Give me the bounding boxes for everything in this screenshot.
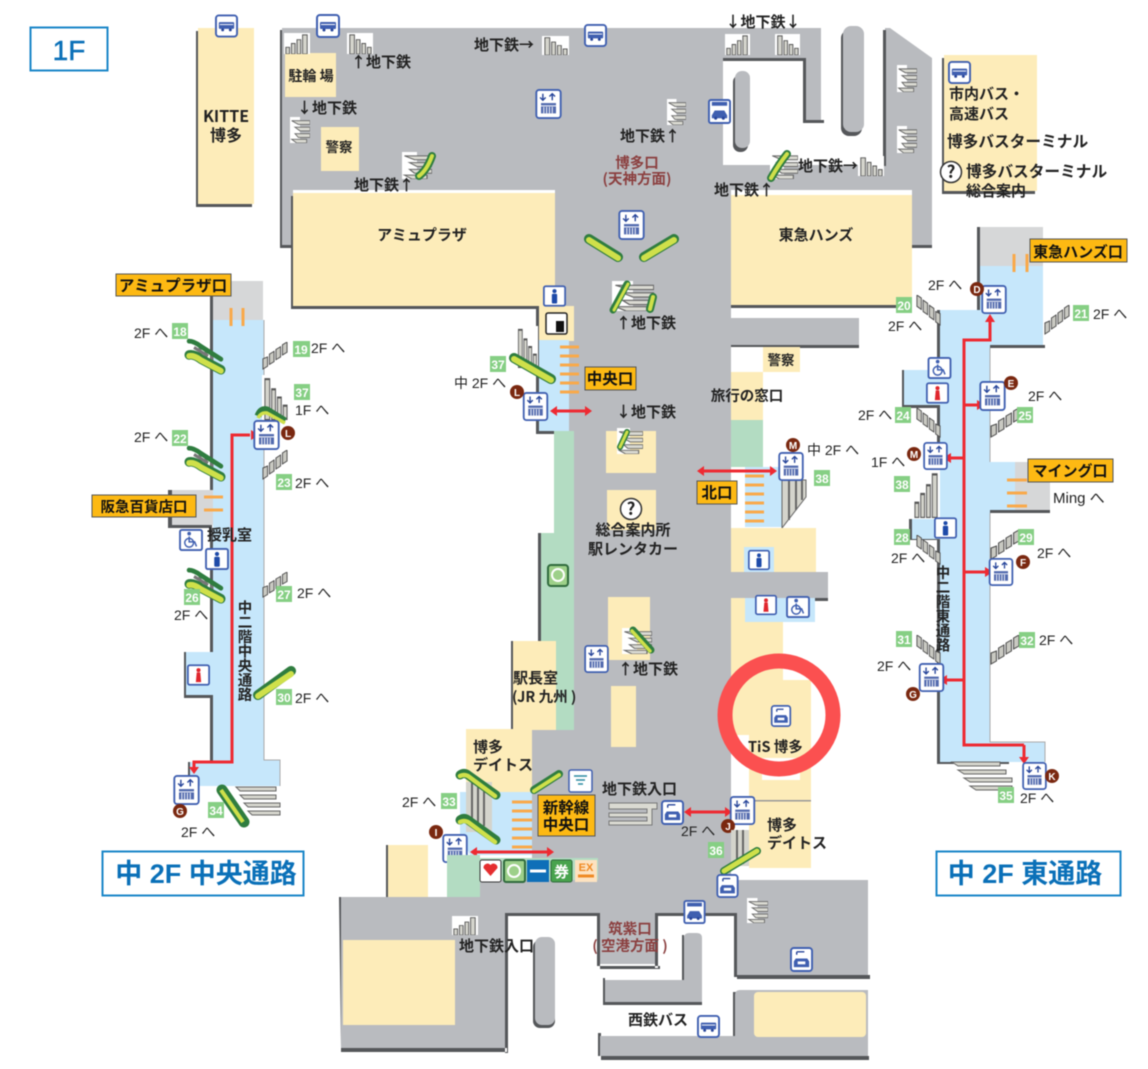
panel: bus terminal: ? [947, 158, 955, 183]
stairs and escalator 37 [490, 326, 551, 380]
corridor shape [902, 227, 1050, 764]
panel: central corridor (left) [92, 274, 345, 896]
bottom stairs [221, 787, 280, 822]
stair numbers: 38 [895, 478, 909, 492]
text: nursing room: 授乳室 [207, 524, 252, 545]
station markers: G [909, 690, 917, 701]
south icons [684, 901, 812, 1037]
north subway labels: ↑地下鉄 [616, 312, 676, 333]
entrance name: Chikushi exit: ( 空港方面 ) [592, 935, 668, 956]
north subway labels: 地下鉄入口 [602, 778, 677, 799]
Shinkansen gate: I [435, 828, 438, 839]
north exit area: M [789, 441, 797, 452]
panel title: central passage [102, 852, 304, 896]
east rooms: TiS 博多 [748, 736, 803, 757]
subway entrance and elevator J: 36 [709, 844, 723, 858]
north subway labels: ↓地下鉄 [616, 401, 676, 422]
right side rooms: 旅行の窓口 [711, 385, 783, 406]
floor destination labels: 2F へ [888, 318, 922, 334]
south structures [343, 933, 869, 1060]
shop: Amu Plaza [291, 193, 555, 309]
station markers: M [910, 450, 918, 461]
subway entrance and elevator J [609, 797, 757, 897]
route arrow: central exit [550, 406, 592, 416]
right side rooms: 警察 [768, 349, 795, 369]
north exit area [697, 438, 859, 528]
north subway labels: ↑地下鉄 [618, 658, 678, 679]
panel: east corridor (right) [858, 227, 1127, 896]
building: KITTE Hakata [196, 28, 254, 207]
panel: bus terminal: 博多バスターミナル [966, 159, 1107, 182]
sign: central exit: 中央口 [587, 367, 633, 389]
floor destination labels: 2F へ [311, 340, 345, 356]
floor destination labels: 2F へ [1028, 388, 1062, 404]
station markers: D [973, 285, 981, 296]
floor label 1F: 1F [53, 35, 85, 66]
panel title: central passage: 中 2F 中央通路 [115, 859, 297, 889]
icon: bus KITTE [216, 15, 237, 37]
north subway labels: 地下鉄→ [474, 34, 534, 55]
north exit area: 38 [815, 472, 829, 486]
stair numbers: 31 [897, 633, 911, 647]
panel: bus terminal: 総合案内 [966, 180, 1026, 201]
floor destination labels: 2F へ [877, 658, 911, 674]
elevator L [510, 385, 547, 420]
corridor name: 中二階中央通路 [234, 600, 256, 703]
shop: Tokyu Hands [731, 195, 912, 308]
north subway labels: 地下鉄↑ [714, 179, 774, 200]
room: station master: 駅長室 [513, 667, 558, 688]
north icons [317, 15, 730, 239]
text: to Ming: Ming へ [1053, 490, 1105, 507]
stair numbers [172, 323, 310, 818]
facility icon row: EX [579, 862, 594, 874]
north exit area: 北口 [701, 481, 733, 503]
room: station master [511, 641, 576, 731]
escalators [189, 341, 291, 696]
facility icons [174, 421, 279, 804]
north subway labels: ↓地下鉄↓ [725, 11, 801, 32]
stair numbers: 34 [209, 804, 223, 818]
sign: Ming entrance: マイング口 [1032, 460, 1108, 481]
entrance name: Chikushi exit [592, 918, 668, 956]
building: KITTE Hakata: 博多 [210, 122, 242, 146]
floor destination labels: 2F へ [928, 277, 962, 293]
north subway labels: 地下鉄↑ [620, 125, 680, 146]
north subway labels [297, 11, 858, 956]
subway entrance and elevator J: 2F へ [681, 823, 715, 839]
subway entrance and elevator J: J [725, 822, 731, 833]
north subway labels: 地下鉄↑ [354, 174, 414, 195]
icon: green window [548, 565, 568, 586]
north subway labels: ↑地下鉄 [351, 51, 411, 72]
gate block shape [536, 306, 579, 730]
facility icons [920, 286, 1046, 789]
floor destination labels [134, 325, 345, 840]
corridor shape [168, 281, 280, 789]
stairs and escalator 37: 37 [491, 358, 505, 372]
station markers: E [1008, 379, 1015, 390]
elevator L: L [514, 388, 520, 399]
station markers: F [1020, 558, 1026, 569]
room: Deitos west [466, 729, 533, 799]
east rooms: 博多 [767, 814, 797, 835]
stair numbers: 29 [1019, 531, 1033, 545]
text: Nishitetsu bus: 西鉄バス [628, 1009, 688, 1030]
stair numbers: 19 [294, 343, 308, 357]
stairs [913, 295, 1069, 790]
stair numbers: 30 [277, 691, 291, 705]
north subway labels: 地下鉄→ [798, 155, 858, 176]
main concourse [339, 190, 870, 1053]
sign: Amu Plaza entrance: アミュプラザ口 [119, 274, 227, 296]
entrance name: Hakata exit: (天神方面) [603, 168, 671, 189]
information desk: 駅レンタカー [588, 538, 678, 559]
panel title: east passage: 中 2F 東通路 [948, 859, 1102, 889]
station markers: K [1048, 772, 1056, 783]
east rooms [731, 528, 827, 868]
Shinkansen gate: 新幹線 [543, 796, 590, 818]
station markers [906, 282, 1059, 783]
stair numbers: 24 [896, 409, 910, 423]
stair numbers: 27 [277, 588, 291, 602]
floor destination labels: 2F へ [297, 585, 331, 601]
stair numbers: 21 [1074, 307, 1088, 321]
box with stairs [606, 428, 656, 473]
floor destination labels: 2F へ [1037, 545, 1071, 561]
icon: info and ticket [544, 286, 567, 334]
panel: south area [343, 901, 869, 1060]
stair numbers: 20 [897, 299, 911, 313]
entrance name: Hakata exit [603, 152, 671, 189]
panel: central gate area [386, 286, 859, 897]
entrance name: Chikushi exit: 筑紫口 [608, 918, 652, 939]
north subway labels: 地下鉄入口 [459, 935, 534, 956]
floor destination labels: 2F へ [134, 325, 168, 341]
stair numbers: 35 [999, 789, 1013, 803]
room: Deitos west: デイトス [473, 754, 533, 775]
station markers: L [285, 429, 291, 440]
information desk [588, 490, 678, 559]
room: bicycle parking: 駐輪 場 [288, 66, 334, 86]
Shinkansen gate: 2F へ [402, 794, 436, 810]
east rooms: デイトス [767, 832, 827, 853]
panel title: east passage [936, 852, 1120, 896]
floor destination labels: 2F へ [1039, 632, 1073, 648]
green room and cream room [386, 845, 598, 897]
stair numbers: 32 [1020, 634, 1034, 648]
floor destination labels: 1F へ [871, 454, 905, 470]
floor destination labels: 2F へ [134, 429, 168, 445]
panel: bus terminal: 博多バスターミナル [947, 129, 1088, 152]
floor destination labels: 2F へ [295, 690, 329, 706]
floor destination labels: 2F へ [1093, 306, 1127, 322]
floor destination labels: 2F へ [891, 550, 925, 566]
highlight circle around TiS Hakata [725, 661, 833, 769]
stair numbers: 37 [295, 386, 309, 400]
stair numbers: 22 [173, 432, 187, 446]
entrance name: Hakata exit: 博多口 [615, 152, 659, 173]
floor destination labels [858, 277, 1127, 806]
north subway labels: ↓地下鉄 [297, 97, 357, 118]
panel: bus terminal: 高速バス [949, 103, 1009, 124]
text: to mid 2F: 中 2F へ [454, 375, 506, 391]
stair numbers [894, 297, 1089, 803]
station markers [173, 426, 295, 818]
stair numbers: 23 [277, 476, 291, 490]
building: KITTE Hakata: KITTE [203, 103, 249, 127]
right side rooms [711, 347, 800, 467]
room: police north: 警察 [326, 136, 353, 156]
facility icon row: 券 [554, 863, 569, 881]
stair numbers: 28 [895, 531, 909, 545]
north exit area: 中 2F へ [807, 442, 859, 458]
room: Deitos west: 博多 [473, 736, 503, 757]
room: police north [321, 127, 359, 171]
stair numbers: 25 [1018, 409, 1032, 423]
floor label 1F [30, 28, 108, 70]
floor destination labels: 2F へ [295, 475, 329, 491]
information desk: ? [627, 495, 635, 520]
central islands [585, 597, 652, 747]
floor destination labels: 2F へ [1020, 790, 1054, 806]
room: station master: (JR 九州 ) [512, 686, 576, 707]
panel: bus terminal [940, 55, 1107, 201]
floor destination labels: 2F へ [858, 407, 892, 423]
corridor name: 中二階東通路 [932, 565, 954, 653]
route arrows [939, 314, 1029, 764]
route arrows [189, 430, 259, 774]
floor destination labels: 1F へ [295, 402, 329, 418]
floor destination labels: 2F へ [181, 824, 215, 840]
room: bicycle parking [285, 53, 336, 97]
north stairs and escalators [284, 33, 917, 935]
shop: Tokyu Hands: 東急ハンズ [779, 224, 853, 245]
stairs [258, 342, 289, 597]
north gray concourse [280, 26, 932, 248]
floor destination labels: 2F へ [174, 607, 208, 623]
sign: Hankyu entrance: 阪急百貨店口 [100, 496, 188, 517]
Shinkansen gate: 33 [442, 795, 456, 809]
facility icon row [480, 860, 597, 882]
sign: Tokyu Hands entrance: 東急ハンズ口 [1033, 241, 1123, 262]
panel: bus terminal: 市内バス・ [949, 83, 1024, 104]
Shinkansen gate [402, 770, 595, 862]
station markers: G [176, 807, 184, 818]
stair numbers: 26 [185, 591, 199, 605]
information desk: 総合案内所 [595, 519, 671, 540]
Shinkansen gate: 中央口 [543, 813, 589, 835]
stair numbers: 18 [173, 325, 187, 339]
shop: Amu Plaza: アミュプラザ [377, 224, 467, 245]
